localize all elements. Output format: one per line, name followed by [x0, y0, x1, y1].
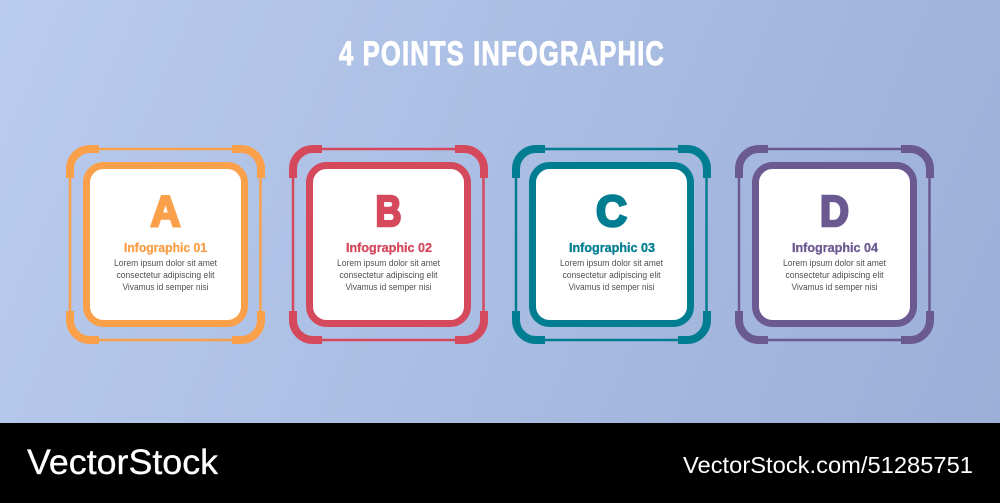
frame C — [516, 149, 707, 340]
inner box A — [86, 166, 244, 324]
body text B: consectetur adipiscing elit — [340, 270, 438, 280]
body text A — [114, 258, 218, 292]
letter A: A — [150, 187, 180, 236]
body text C: consectetur adipiscing elit — [562, 270, 661, 280]
heading A: Infographic 01 — [124, 241, 207, 255]
body text D — [783, 258, 887, 292]
footer url: VectorStock.com/51285751 — [683, 452, 973, 478]
heading C: Infographic 03 — [569, 241, 655, 255]
frame A — [70, 149, 261, 340]
body text D: Vivamus id semper nisi — [792, 282, 878, 292]
panel: card D — [739, 149, 930, 340]
letter D: D — [820, 187, 849, 236]
body text D: consectetur adipiscing elit — [786, 270, 884, 280]
footer logo: VectorStock — [27, 443, 219, 482]
letter B: B — [376, 187, 402, 236]
body text A: Lorem ipsum dolor sit amet — [114, 258, 218, 268]
panel: card C — [516, 149, 707, 340]
inner box B — [310, 166, 468, 324]
letter C: C — [596, 187, 627, 236]
body text D: Lorem ipsum dolor sit amet — [783, 258, 887, 268]
panel: card A — [70, 149, 261, 340]
body text C: Vivamus id semper nisi — [568, 282, 655, 292]
title: 4 POINTS INFOGRAPHIC — [339, 35, 665, 73]
footer band — [0, 423, 1000, 503]
body text B — [337, 258, 441, 292]
frame B — [293, 149, 484, 340]
inner box C — [532, 166, 690, 324]
frame D — [739, 149, 930, 340]
heading D: Infographic 04 — [792, 241, 878, 255]
body text B: Lorem ipsum dolor sit amet — [337, 258, 441, 268]
body text C: Lorem ipsum dolor sit amet — [560, 258, 664, 268]
body text C — [560, 258, 664, 292]
inner box D — [756, 166, 914, 324]
body text A: consectetur adipiscing elit — [116, 270, 215, 280]
body text A: Vivamus id semper nisi — [122, 282, 209, 292]
panel: card B — [293, 149, 484, 340]
body text B: Vivamus id semper nisi — [346, 282, 432, 292]
heading B: Infographic 02 — [346, 241, 432, 255]
